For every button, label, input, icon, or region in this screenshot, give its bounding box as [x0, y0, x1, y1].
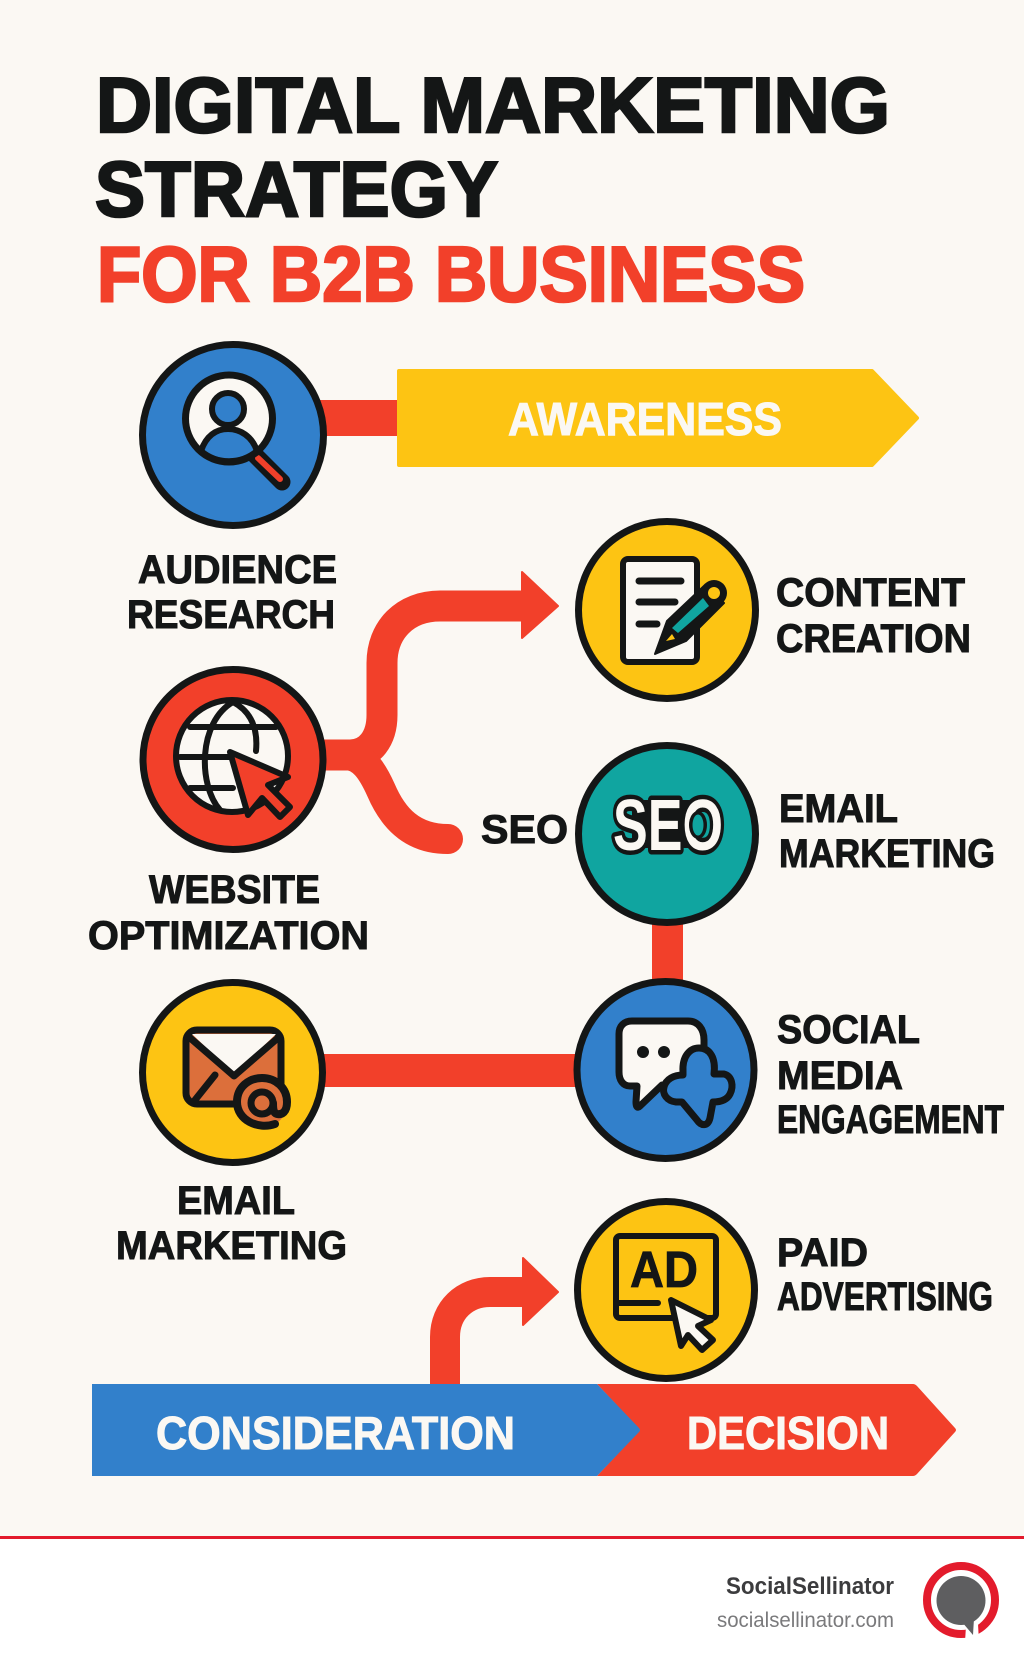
- connector: email marketing to social media: [320, 1054, 580, 1087]
- icon: audience research: [142, 344, 324, 526]
- label: email marketing right: MARKETING: [779, 832, 995, 876]
- title: DIGITAL MARKETING: [96, 61, 890, 149]
- banner: consideration: [92, 1384, 640, 1476]
- label: email marketing right: [779, 787, 995, 876]
- label: social media engagement: [777, 1008, 1004, 1142]
- icon: social media engagement: [577, 982, 754, 1158]
- label: audience research: RESEARCH: [127, 593, 335, 637]
- icon: SEO: SEO: [613, 786, 723, 866]
- label: audience research: [127, 548, 337, 637]
- label: social media engagement: MEDIA: [777, 1054, 903, 1098]
- label: audience research: AUDIENCE: [138, 548, 337, 592]
- footer: [0, 1536, 1024, 1666]
- label: email marketing right: EMAIL: [779, 787, 898, 831]
- title: FOR B2B BUSINESS: [97, 230, 805, 318]
- title: STRATEGY: [95, 145, 498, 233]
- connector: audience research to awareness: [320, 400, 400, 436]
- icon: SEO: [578, 746, 756, 922]
- label: website optimization: [88, 868, 369, 958]
- banner: awareness: [399, 371, 917, 465]
- label: paid advertising: PAID: [777, 1231, 868, 1275]
- banner: awareness: AWARENESS: [508, 393, 782, 445]
- label: website optimization: OPTIMIZATION: [88, 914, 369, 958]
- icon: paid advertising: [578, 1202, 754, 1378]
- icon: SocialSellinator logo: [927, 1566, 995, 1642]
- footer brand text: [717, 1573, 894, 1632]
- icon: content creation: [578, 522, 756, 698]
- label: email marketing left: MARKETING: [116, 1224, 347, 1268]
- label: paid advertising: [777, 1231, 993, 1319]
- banner: consideration: CONSIDERATION: [156, 1407, 515, 1459]
- banner: decision: DECISION: [687, 1407, 889, 1459]
- label: content creation: [776, 571, 971, 661]
- label: website optimization: WEBSITE: [149, 868, 320, 912]
- label: SEO: SEO: [481, 808, 568, 852]
- arrow: website to content creation: [322, 572, 558, 755]
- label: email marketing left: [116, 1179, 347, 1268]
- label: social media engagement: SOCIAL: [777, 1008, 920, 1052]
- banner: decision: [597, 1384, 956, 1476]
- icon: email marketing: [142, 982, 322, 1162]
- label: content creation: CREATION: [776, 617, 971, 661]
- title: [95, 61, 890, 318]
- footer brand text: SocialSellinator: [726, 1573, 894, 1600]
- footer brand text: socialsellinator.com: [717, 1609, 894, 1632]
- branch: website to SEO: [322, 755, 448, 839]
- icon: paid advertising: AD: [630, 1241, 698, 1298]
- label: content creation: CONTENT: [776, 571, 965, 615]
- connector: SEO to social media: [652, 920, 683, 984]
- arrow: consideration to paid advertising: [445, 1258, 558, 1390]
- icon: website optimization: [143, 670, 323, 850]
- label: email marketing left: EMAIL: [177, 1179, 295, 1223]
